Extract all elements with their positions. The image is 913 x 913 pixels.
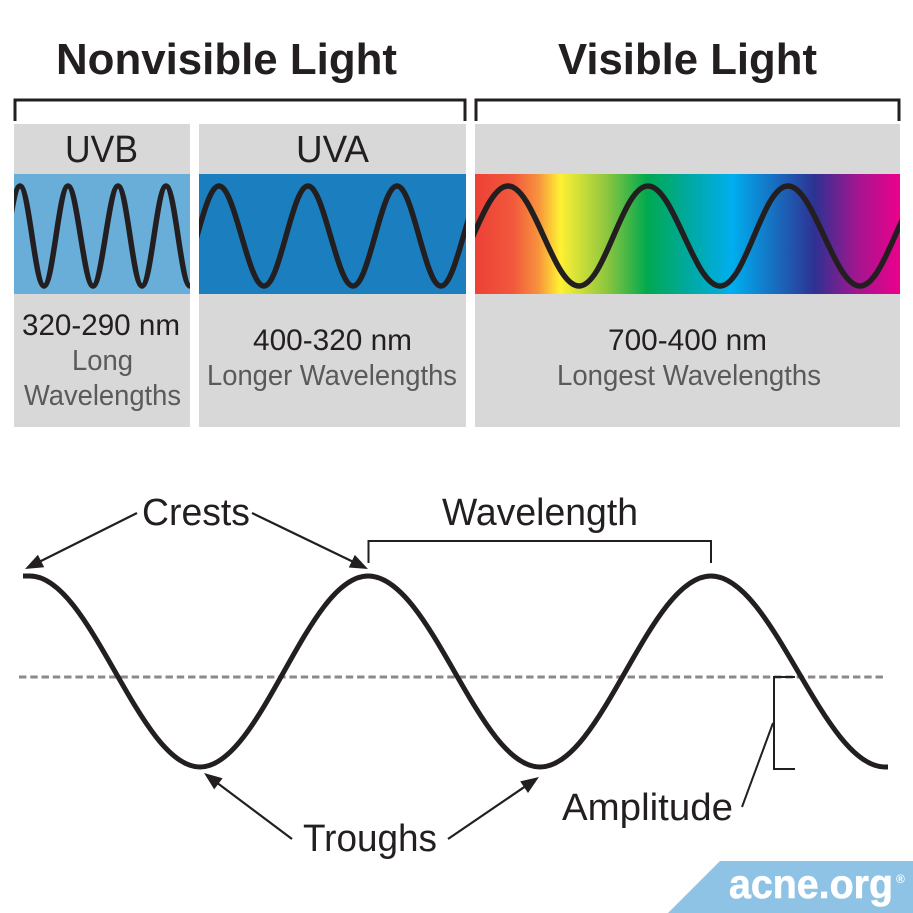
visible description: Longest Wavelengths xyxy=(557,360,821,392)
UVB label: UVB xyxy=(65,129,138,171)
panel: UVB xyxy=(0,124,190,427)
UVB colour band xyxy=(14,174,190,294)
bracket: visible light xyxy=(476,100,899,121)
label: Wavelength: Wavelength xyxy=(442,492,638,534)
bracket: nonvisible light xyxy=(15,100,465,121)
arrow: trough left xyxy=(204,773,292,839)
bracket: amplitude xyxy=(774,677,795,769)
UVB description line 1: Long xyxy=(72,345,133,377)
UVA colour band xyxy=(199,174,466,294)
main wave diagram xyxy=(23,576,888,767)
arrow: trough right xyxy=(448,777,539,839)
heading: Nonvisible Light: Nonvisible Light xyxy=(56,35,397,84)
label: Troughs: Troughs xyxy=(303,818,437,860)
UVB wave xyxy=(0,186,190,286)
arrow: crest left xyxy=(25,513,137,569)
logo: acne.org: acne.org xyxy=(729,861,893,907)
visible light wave xyxy=(438,186,913,286)
heading: Visible Light: Visible Light xyxy=(558,35,817,84)
UVB description line 2: Wavelengths xyxy=(24,380,181,412)
UVA label: UVA xyxy=(296,129,370,171)
UVA description: Longer Wavelengths xyxy=(207,360,457,392)
visible spectrum band xyxy=(475,174,900,294)
leader line: amplitude xyxy=(742,723,773,807)
UVA wave xyxy=(175,186,486,286)
UVB range: 320-290 nm xyxy=(22,309,180,342)
label: Amplitude: Amplitude xyxy=(562,787,733,829)
panel: UVA xyxy=(199,124,466,427)
panel: visible light xyxy=(475,124,900,427)
bracket: wavelength xyxy=(368,541,711,563)
logo: acne.org: ® xyxy=(896,872,905,886)
logo: acne.org xyxy=(668,861,913,913)
arrow: crest right xyxy=(252,513,368,569)
label: Crests: Crests xyxy=(142,492,250,534)
midline: dashed axis xyxy=(19,676,883,678)
visible range: 700-400 nm xyxy=(608,324,767,357)
UVA range: 400-320 nm xyxy=(253,324,412,357)
